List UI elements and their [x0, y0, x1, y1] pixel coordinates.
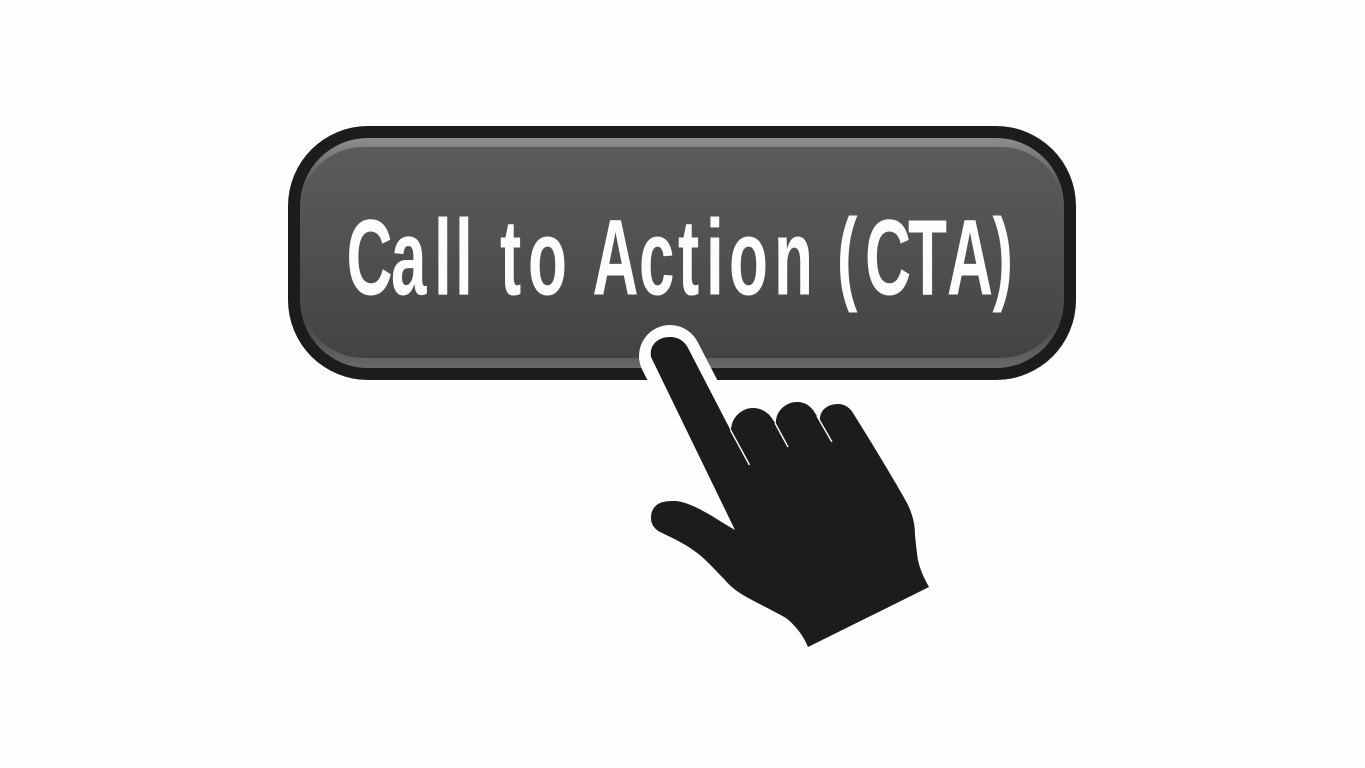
button label: )	[992, 198, 1013, 314]
finger gap lines	[730, 416, 832, 465]
button label: to	[500, 197, 567, 318]
button label: CTA	[865, 197, 993, 318]
button bevel highlight	[300, 138, 1064, 368]
button label	[347, 197, 1013, 318]
index finger white halo	[670, 356, 735, 482]
button outer border	[288, 126, 1076, 380]
button: call to action	[288, 126, 1076, 380]
button face	[301, 147, 1063, 358]
icon: pointing hand	[651, 337, 929, 647]
button label: Action	[592, 197, 813, 318]
button label: Call	[347, 197, 473, 318]
hand silhouette	[651, 337, 929, 647]
button label: (	[837, 198, 858, 314]
